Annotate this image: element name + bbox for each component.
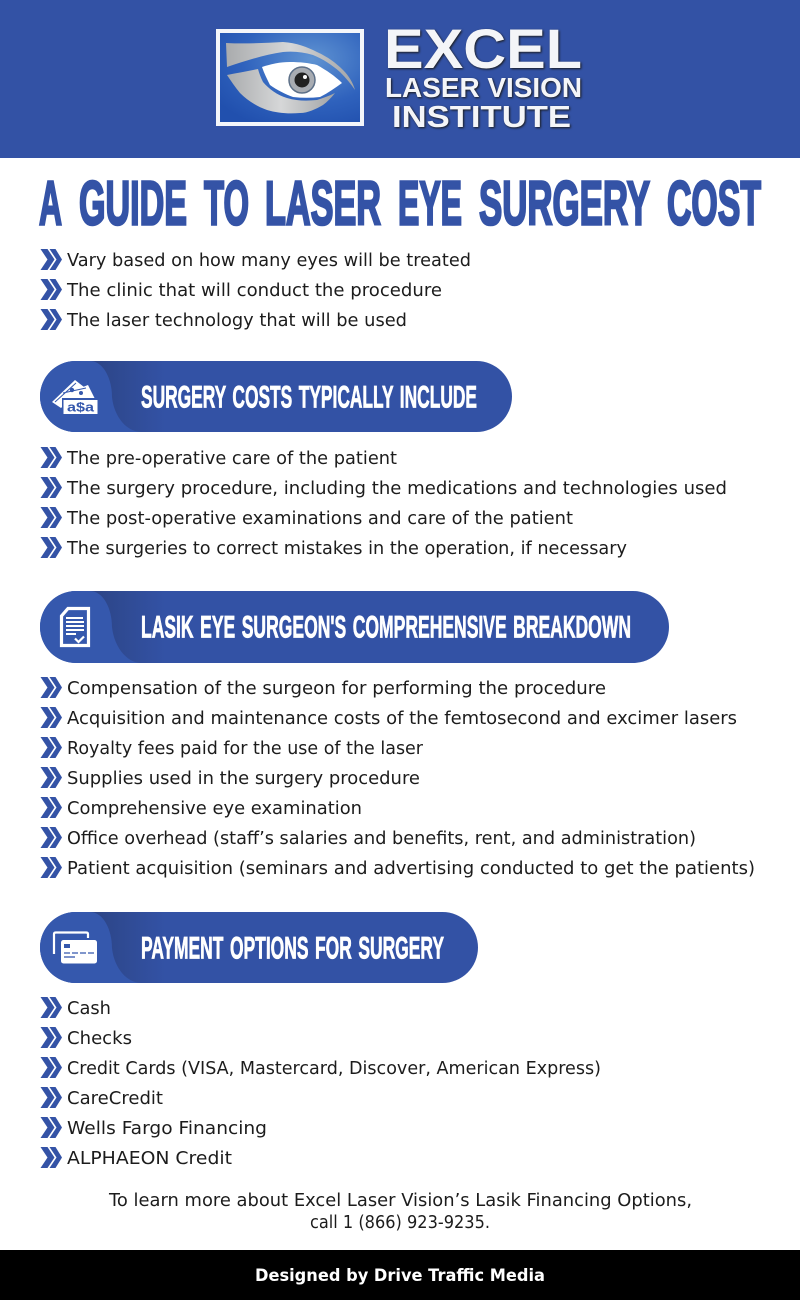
list item: Vary based on how many eyes will be treated [67,251,471,271]
list item: The surgery procedure, including the medications and technologies used [66,479,727,499]
icon: cash: a$a [67,400,95,414]
logo [218,17,582,134]
list item: Compensation of the surgeon for performing the procedure [67,679,606,699]
logo wordmark: LASER VISION [385,72,582,103]
logo icon: eye [218,31,362,124]
intro list [40,249,471,331]
section heading: payment options [40,912,478,983]
list item: The post-operative examinations and care of the patient [66,509,573,529]
payment list [40,997,601,1169]
list item: ALPHAEON Credit [67,1149,232,1169]
title: SURGERY [479,170,650,239]
section heading: lasik breakdown [40,591,669,663]
list item: The laser technology that will be used [66,311,407,331]
logo wordmark: INSTITUTE [392,99,571,134]
footer band: Designed by Drive Traffic Media [255,1266,545,1285]
closing call to action: To learn more about Excel Laser Vision’s Lasik Financing Options, [108,1191,692,1211]
footer band [0,1250,800,1300]
section heading: surgery costs [40,361,512,432]
title: GUIDE [79,170,187,239]
list item: Comprehensive eye examination [67,799,362,819]
list item: Royalty fees paid for the use of the laser [67,739,424,759]
list item: The clinic that will conduct the procedure [66,281,442,301]
list item: Acquisition and maintenance costs of the femtosecond and excimer lasers [67,709,737,729]
list item: The pre-operative care of the patient [66,449,397,469]
closing call to action: call 1 (866) 923-9235. [310,1213,490,1233]
title: LASER [265,170,381,239]
heading text: SURGERY COSTS TYPICALLY INCLUDE [141,379,477,415]
list item: Wells Fargo Financing [67,1119,267,1139]
title: TO [204,170,249,239]
list item: Checks [67,1029,132,1049]
list item [40,997,111,1019]
list item: The surgeries to correct mistakes in the operation, if necessary [66,539,627,559]
list item [40,1087,163,1109]
list item: CareCredit [67,1089,163,1109]
title: EYE [398,170,462,239]
list item: Patient acquisition (seminars and advertising conducted to get the patients) [67,859,755,879]
logo wordmark [384,17,582,134]
icon: credit cards [54,932,97,964]
list item: Office overhead (staff’s salaries and benefits, rent, and administration) [67,829,696,849]
heading text: PAYMENT OPTIONS FOR SURGERY [141,930,444,966]
icon: document [62,608,88,646]
icon: cash [52,380,99,415]
closing call to action [108,1191,692,1233]
list item: Supplies used in the surgery procedure [67,769,420,789]
header band [0,0,800,158]
title: A [39,170,62,239]
breakdown list [40,677,755,879]
list item: Credit Cards (VISA, Mastercard, Discover, American Express) [67,1059,601,1079]
title [39,170,761,239]
list item [40,1027,132,1049]
list item: Cash [67,999,111,1019]
logo wordmark: EXCEL [384,17,582,80]
surgery costs list [40,447,727,559]
